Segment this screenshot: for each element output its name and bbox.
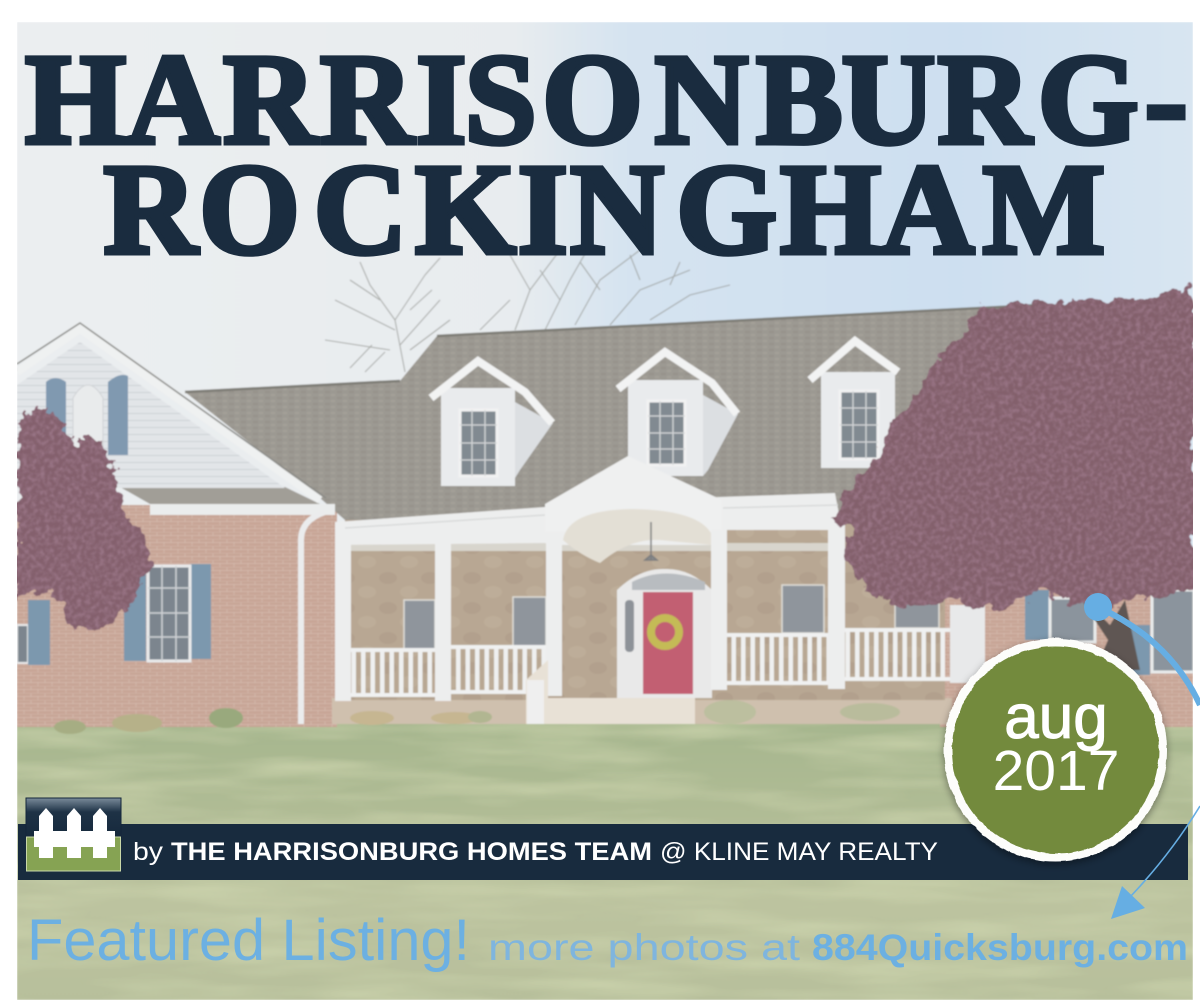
badge year: 2017: [993, 739, 1119, 803]
railing 2: [451, 649, 546, 693]
portico pediment: [544, 456, 716, 508]
arrowhead: [1111, 886, 1145, 919]
left gable: [17, 323, 326, 500]
body: [441, 388, 515, 486]
gable shutter right: [108, 375, 128, 455]
byline lead: by: [133, 838, 164, 866]
arrow to listing url: [1084, 593, 1200, 919]
side door, right: [950, 605, 985, 683]
gable shutter left: [45, 378, 67, 434]
right wing window 2: [1126, 590, 1194, 675]
tree trunk, right: [1075, 590, 1140, 670]
soffit and eave, left wing: [150, 504, 335, 515]
byline bar: [18, 824, 1188, 880]
downspout: [301, 512, 325, 724]
porch railings: [350, 630, 950, 696]
eave shadow lines beside portico: [345, 505, 838, 528]
badge month: aug: [1004, 683, 1108, 752]
far left window with shutter: [17, 600, 50, 665]
shrubs along foundation: [54, 708, 243, 734]
porch beam: [335, 493, 842, 545]
listing url: 884Quicksburg.com: [812, 927, 1188, 968]
main roof: [186, 308, 1000, 521]
shutter: [190, 564, 211, 659]
fence: [34, 808, 115, 858]
bar background: [18, 824, 1188, 880]
front steps: [526, 660, 695, 724]
brick wall, left wing: [17, 505, 337, 727]
title: [25, 28, 1188, 282]
wreath: [651, 618, 679, 646]
left wing window: [124, 564, 211, 661]
porch ceiling shade: [345, 543, 835, 551]
title line 1: HARRISONBURG-: [25, 28, 1188, 172]
cheek: [515, 402, 553, 478]
arrow lower thin curve: [1130, 806, 1200, 897]
door sidelight: [625, 600, 634, 652]
step post: [527, 680, 544, 724]
logo sky: [26, 798, 121, 838]
roof ridge line: [185, 305, 1040, 392]
brick wall, right wing: [940, 585, 1193, 727]
front door surround: [617, 569, 712, 698]
byline realty: @ KLINE MAY REALTY: [660, 838, 938, 866]
dormer 3: [810, 341, 898, 468]
dormer 2: [618, 352, 738, 476]
lower left roof band: [120, 487, 320, 504]
portico arch ceiling: [563, 509, 712, 563]
gable trim: [280, 467, 323, 503]
transom: [632, 574, 705, 590]
shutter: [124, 566, 146, 661]
arrow upper thick curve: [1098, 607, 1200, 705]
gable siding: [17, 342, 285, 488]
icon: picket fence logo: [26, 798, 121, 871]
byline team name: THE HARRISONBURG HOMES TEAM: [171, 838, 652, 866]
sky: [17, 22, 1193, 546]
railing 1: [350, 652, 435, 696]
gable edge shadow: [17, 323, 326, 498]
logo grass: [26, 837, 120, 871]
title line 2: ROCKINGHAM: [104, 138, 1105, 282]
left maple tree: [17, 405, 150, 630]
railing 4: [845, 632, 950, 678]
porch lantern: [645, 522, 657, 560]
right maple tree: [830, 284, 1195, 610]
shrubs in front of foundation: [350, 700, 900, 725]
arrow start dot: [1084, 593, 1112, 621]
red door: [643, 592, 693, 694]
porch windows: [404, 585, 939, 650]
featured listing line: [27, 908, 1188, 973]
roof trim: [431, 361, 552, 423]
porch stone wall: [345, 520, 945, 700]
right wing window 1: [1025, 590, 1095, 642]
sash: [148, 566, 190, 661]
bare trees behind house: [325, 245, 730, 372]
window: [460, 410, 497, 476]
date badge: [948, 642, 1163, 858]
lawn: [17, 724, 1193, 1000]
featured listing heading: Featured Listing!: [27, 908, 470, 973]
porch columns: [335, 524, 845, 701]
foundation: [332, 698, 952, 724]
more photos label: more photos at: [488, 927, 801, 968]
railing 3: [727, 636, 828, 682]
badge circle: [948, 642, 1163, 858]
gable arched window: [73, 385, 103, 450]
dormer 1: [431, 361, 553, 486]
